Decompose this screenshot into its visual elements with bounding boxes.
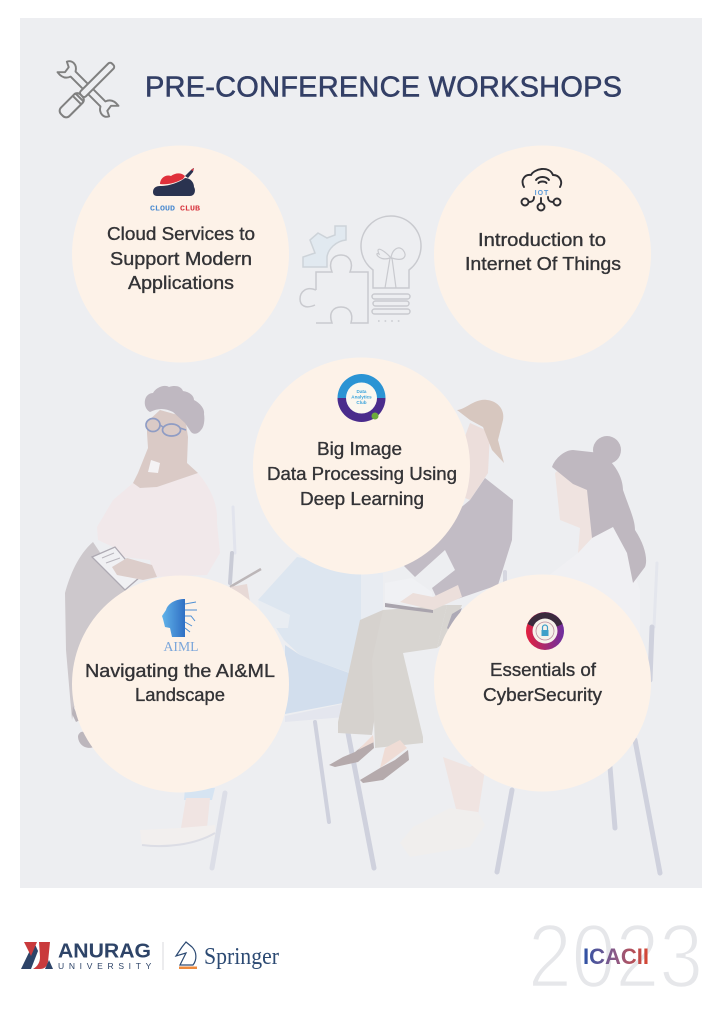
person: woman in blue shirt [140, 557, 383, 847]
icon: puzzle, gear and light bulb [300, 216, 421, 323]
text: Cloud Services title [107, 224, 255, 293]
icon: Data Analytics Club logo: Data [357, 389, 367, 394]
icon: IoT cloud [522, 169, 561, 210]
panel: Cloud Services workshop [72, 146, 289, 362]
icon: Data Analytics Club logo [338, 374, 386, 422]
icon: Security Wing logo [526, 612, 564, 650]
icon: Data Analytics Club logo: Analytics [351, 394, 372, 400]
illustration: seated people [65, 386, 660, 873]
panel: Internet of Things workshop [434, 146, 651, 362]
title: PRE-CONFERENCE WORKSHOPS [145, 72, 622, 104]
text: Cloud Services title: Cloud Services to [107, 224, 255, 244]
text: Cloud Services title: Support Modern [110, 249, 252, 269]
panel: AI and ML workshop [72, 576, 289, 792]
icon: Data Analytics Club logo: Club [356, 400, 367, 405]
logo: Springer: Springer [204, 944, 279, 970]
person: woman with ponytail [329, 400, 513, 783]
icon: crossed wrench and screwdriver [57, 58, 119, 120]
person: woman with bun [400, 436, 646, 857]
icon: Cloud Club logo [150, 168, 201, 214]
text: Big Image Data title: Deep Learning [300, 489, 424, 509]
logo: Anurag University: UNIVERSITY [58, 961, 156, 971]
icon: IoT cloud: IOT [535, 190, 549, 197]
text: Big Image Data title: Data Processing Using [267, 464, 457, 484]
person: woman with glasses [65, 386, 261, 748]
text: Internet of Things title [465, 230, 621, 274]
icon: Cloud Club logo: CLOUD CLUB [150, 206, 201, 214]
text: Big Image Data title: Big Image [317, 439, 402, 459]
text: CyberSecurity title: CyberSecurity [483, 685, 602, 705]
panel: CyberSecurity workshop [434, 574, 651, 792]
text: AI and ML title: Navigating the AI&ML [85, 661, 275, 681]
text: AI and ML title: Landscape [135, 685, 225, 705]
text: Internet of Things title: Internet Of Things [465, 254, 621, 274]
icon: AIML head logo [162, 599, 198, 655]
chair legs and backs [212, 507, 660, 873]
text: Internet of Things title: Introduction to [478, 230, 606, 250]
conference mark: 2023 ICACII: ICACII [583, 944, 649, 969]
text: Big Image Data title [267, 439, 457, 509]
text: Cloud Services title: Applications [128, 273, 234, 293]
panel: Big Image Data workshop [253, 358, 470, 574]
icon: AIML head logo: AIML [164, 640, 198, 655]
logo: Anurag University [21, 940, 156, 971]
logo: Springer [163, 942, 279, 970]
text: AI and ML title [85, 661, 275, 705]
text: CyberSecurity title [483, 660, 602, 705]
text: CyberSecurity title: Essentials of [490, 660, 597, 680]
logo: Anurag University: ANURAG [58, 940, 151, 962]
